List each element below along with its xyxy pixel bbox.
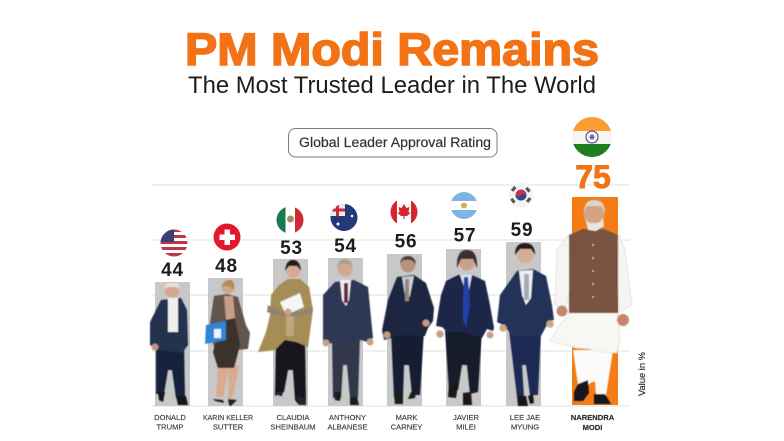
name: Karin Keller Sutter: KARIN KELLER [203, 413, 253, 422]
figure: Albanese [322, 259, 374, 405]
bar: Keller Sutter [208, 278, 243, 406]
value: 44: 44 [161, 260, 184, 281]
name: Javier Milei: MILEI [456, 422, 476, 432]
flag: Australia [330, 204, 358, 232]
name: Donald Trump: TRUMP [156, 422, 184, 432]
bar: Trump [155, 282, 190, 406]
figure: Sheinbaum [258, 260, 313, 405]
leader: Donald Trump [150, 229, 190, 432]
figure: Carney [382, 256, 434, 404]
flag: Mexico [276, 207, 304, 233]
name: Mark Carney: CARNEY [391, 422, 422, 432]
axis note: value in percent: Value in % [637, 351, 648, 396]
chart label pill: Global Leader Approval Rating [299, 135, 491, 150]
value: 56: 56 [395, 232, 417, 252]
name: Narendra Modi: NARENDRA [571, 413, 615, 422]
leader: Karin Keller Sutter [203, 224, 253, 432]
bar: Lee [506, 242, 541, 406]
flag: USA [160, 229, 188, 257]
name: Claudia Sheinbaum: CLAUDIA [277, 413, 310, 422]
leader: Anthony Albanese [322, 204, 374, 432]
value: 75: 75 [575, 159, 611, 195]
name: Donald Trump: DONALD [154, 413, 186, 422]
figure: Trump [150, 282, 188, 405]
name: Lee Jae Myung: LEE JAE [510, 413, 540, 422]
leader: Claudia Sheinbaum [258, 206, 316, 432]
name: Narendra Modi: MODI [583, 423, 602, 432]
flag: Canada [390, 200, 418, 224]
figure: Keller Sutter [205, 280, 250, 406]
flag: Switzerland [214, 224, 240, 250]
bar: Albanese [328, 258, 363, 406]
figure: Milei [436, 250, 494, 405]
bar: Sheinbaum [273, 259, 308, 406]
name: Anthony Albanese: ALBANESE [327, 422, 368, 432]
name: Mark Carney: MARK [396, 413, 417, 422]
flag: India [572, 117, 612, 158]
value: 59: 59 [511, 220, 533, 241]
leader: Javier Milei [436, 192, 494, 432]
flag: South Korea [508, 182, 534, 208]
chart label pill [288, 128, 497, 157]
value: 53: 53 [280, 238, 303, 259]
subtitle: The Most Trusted Leader in The World [188, 72, 596, 99]
figure: Modi [550, 200, 632, 404]
name: Lee Jae Myung: MYUNG [511, 422, 539, 432]
value: 57: 57 [454, 226, 476, 246]
figure: Lee [497, 243, 554, 406]
name: Claudia Sheinbaum: SHEINBAUM [270, 422, 316, 432]
value: 48: 48 [215, 256, 238, 277]
name: Anthony Albanese: ANTHONY [329, 413, 366, 422]
flag: Argentina [450, 192, 478, 219]
name: Javier Milei: JAVIER [453, 413, 480, 422]
value: 54: 54 [334, 236, 357, 257]
leader: Lee Jae Myung [497, 182, 554, 432]
leader: Narendra Modi [550, 117, 632, 432]
leader: Mark Carney [382, 198, 434, 432]
bar: Carney [387, 254, 422, 406]
bar: Modi [572, 197, 618, 405]
name: Karin Keller Sutter: SUTTER [213, 422, 244, 432]
bar: Milei [446, 249, 481, 406]
title: PM Modi Remains [185, 24, 599, 75]
